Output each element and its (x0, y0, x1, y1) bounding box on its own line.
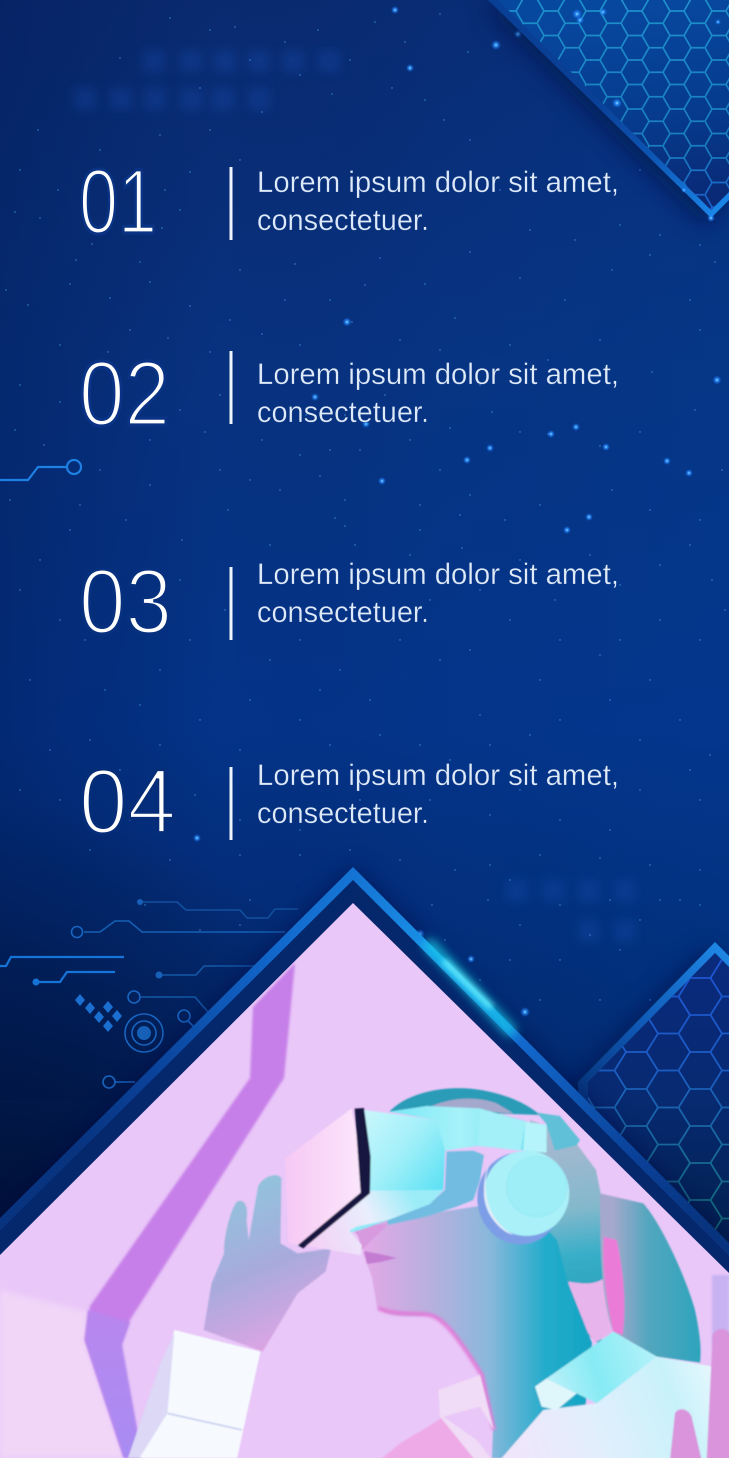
item 01 (79, 151, 619, 253)
left hand (204, 1175, 331, 1352)
panel: bottom-right hexagon triangle (570, 942, 729, 1230)
circuit line: left mid ring (0, 460, 81, 480)
strap (389, 1106, 527, 1151)
panel: big triangle frame (0, 867, 729, 1300)
divider (230, 767, 232, 840)
text block: Lorem ipsum dolor sit amet, (257, 759, 619, 792)
star field (6, 6, 725, 1120)
text block: Lorem ipsum dolor sit amet, (257, 166, 619, 199)
text block: consectetuer. (257, 204, 429, 237)
black seam (298, 1108, 371, 1248)
text block: consectetuer. (257, 797, 429, 830)
divider (230, 567, 232, 640)
nose (354, 1224, 386, 1250)
right hand fingers (670, 1329, 729, 1458)
item 03 (79, 551, 619, 653)
icon: diamond dots (75, 994, 122, 1032)
headset lower body (298, 1190, 443, 1255)
text block: consectetuer. (257, 396, 429, 429)
item 04 (79, 751, 619, 853)
headset (285, 1106, 580, 1255)
divider (230, 351, 232, 424)
divider (230, 167, 232, 240)
jaw pink edge (378, 1308, 494, 1430)
sleeve (128, 1330, 260, 1458)
number 02: 02 (79, 343, 170, 445)
headset body (297, 1109, 445, 1247)
shirt left side (380, 1375, 494, 1458)
number 04: 04 (79, 751, 176, 853)
pale pink hair fan and ponytail (568, 1193, 701, 1363)
text block: Lorem ipsum dolor sit amet, (257, 358, 619, 391)
photo: woman wearing VR headset (0, 890, 729, 1458)
shirt body and collar (500, 1329, 729, 1458)
text block: Lorem ipsum dolor sit amet, (257, 558, 619, 591)
text block: consectetuer. (257, 596, 429, 629)
panel: top-right hexagon triangle (470, 0, 729, 230)
ear cup (477, 1151, 569, 1244)
hair band on top (389, 1088, 540, 1115)
circuit lines: lower left group (0, 899, 298, 1088)
wall shadow (0, 963, 729, 1458)
item 02 (79, 343, 619, 445)
number 01: 01 (79, 151, 157, 253)
glow on right edge (430, 945, 510, 1030)
panel: circuit decoration lines (0, 460, 298, 1088)
face and neck (363, 1200, 592, 1458)
lips (364, 1251, 397, 1264)
blurred pixel squares (74, 50, 636, 942)
padding under headset (387, 1151, 484, 1225)
hair behind the ear (530, 1120, 604, 1344)
number 03: 03 (79, 551, 172, 653)
woman figure (128, 1088, 729, 1458)
headset visor (285, 1108, 367, 1245)
